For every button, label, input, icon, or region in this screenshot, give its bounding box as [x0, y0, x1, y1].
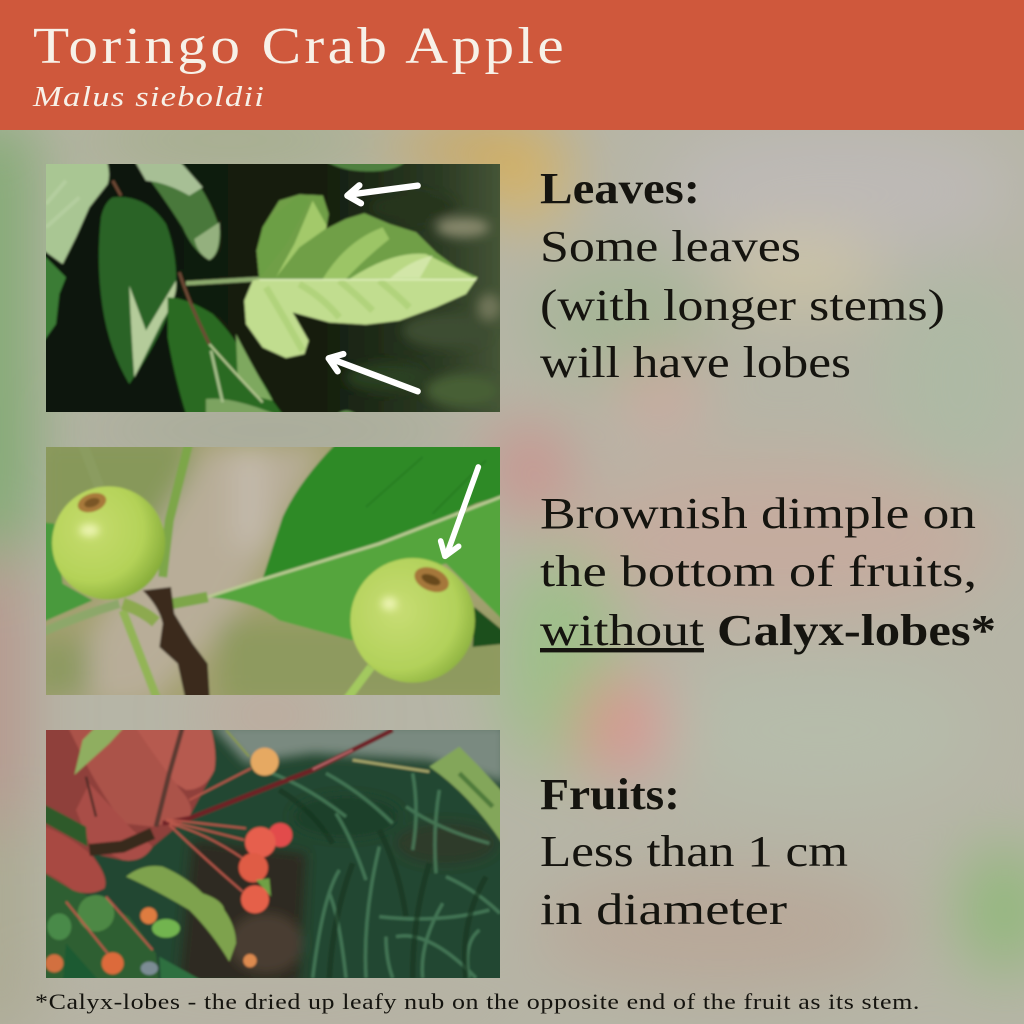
- text: leaves: Leaves:: [540, 164, 700, 213]
- bottom leaf: [168, 297, 286, 419]
- long variegated leaf: [99, 197, 176, 384]
- grass: [253, 767, 500, 978]
- arrow: dimple: [441, 467, 478, 556]
- hand: [39, 723, 215, 893]
- title banner: [0, 0, 1024, 130]
- text: leaves: (with longer stems): [540, 281, 945, 330]
- left edge leaf: [46, 255, 68, 341]
- text: fruits: Less than 1 cm: [540, 827, 848, 876]
- text: leaves: will have lobes: [540, 338, 851, 387]
- lobed leaf: [244, 195, 478, 358]
- top right leaf: [428, 746, 500, 842]
- crab apples: [45, 748, 292, 974]
- text: dimple: [540, 489, 996, 655]
- text: fruits: Fruits:: [540, 770, 680, 819]
- photo: lobed leaves: [46, 164, 500, 412]
- footnote: *Calyx-lobes - the dried up leafy nub on the opposite end of the fruit as its stem.: [35, 989, 920, 1014]
- text: dimple: the bottom of fruits,: [540, 547, 977, 596]
- text: dimple: without: [540, 606, 704, 655]
- top-left leaf: [46, 164, 112, 266]
- twigs: [113, 181, 209, 344]
- left apple: [52, 486, 165, 600]
- stems: [39, 604, 119, 634]
- small top leaf: [73, 730, 124, 776]
- lower leaf half: [206, 495, 507, 640]
- top centre leaf: [150, 166, 222, 261]
- arrow: bottom lobe: [329, 354, 418, 391]
- large leaf: [126, 866, 236, 962]
- left leaf: [46, 522, 93, 622]
- twigs: [163, 730, 393, 823]
- subtitle: Malus sieboldii: [32, 81, 265, 113]
- photo: small fruits in hand: [46, 730, 500, 978]
- fruit stems: [66, 768, 251, 953]
- lower left greenery: [46, 874, 159, 978]
- upper dark leaf half: [263, 440, 507, 579]
- text: dimple: Brownish dimple on: [540, 489, 976, 538]
- text: fruits: [540, 770, 848, 934]
- branch: [143, 587, 210, 702]
- arrow: top lobe: [347, 185, 418, 203]
- text: leaves: Some leaves: [540, 222, 801, 271]
- right apple: [350, 558, 475, 683]
- photo: green fruits with dimple: [46, 447, 500, 695]
- text: dimple: Calyx-lobes*: [717, 606, 996, 655]
- text: fruits: in diameter: [540, 885, 787, 934]
- text: leaves: [540, 164, 945, 387]
- title: Toringo Crab Apple: [33, 18, 567, 75]
